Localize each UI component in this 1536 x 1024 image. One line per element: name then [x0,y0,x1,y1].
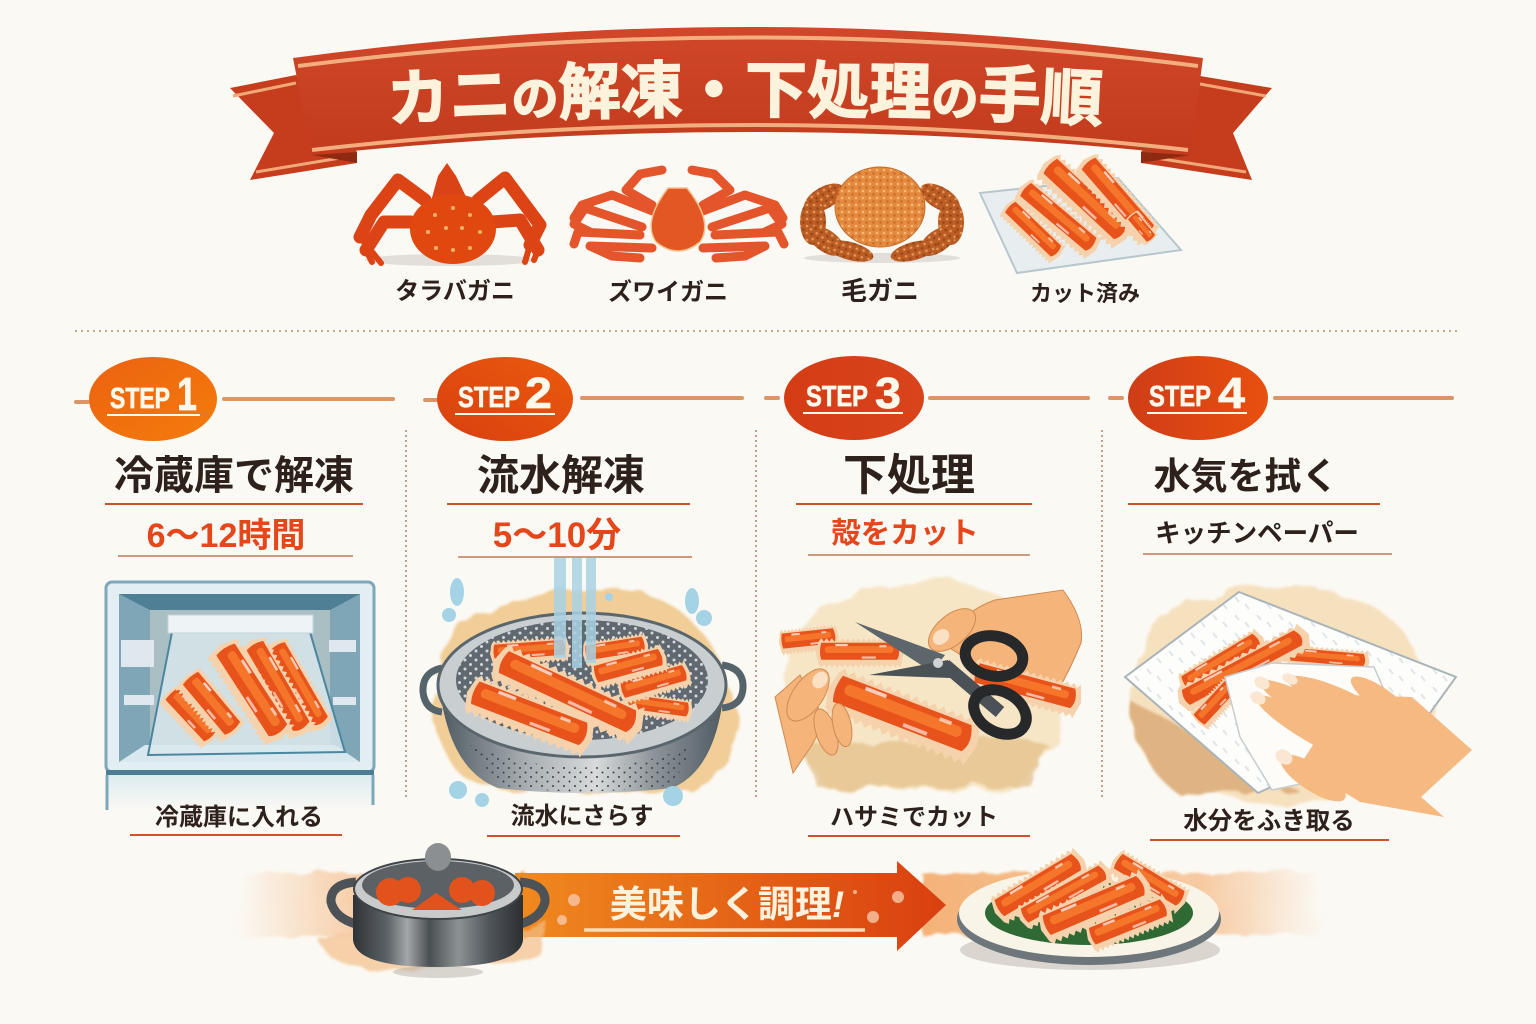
label: kegani: 毛ガニ [841,276,919,306]
step 1 panel [76,357,393,835]
step 4 badge: 4 [1218,369,1246,418]
banner top stripe [298,38,1198,66]
banner bottom stripe [312,125,1188,150]
running water [554,558,596,668]
step 1 badge [76,357,393,441]
water droplets [442,578,712,807]
kitchen scissors [855,622,1034,743]
crab legs on plate [987,845,1193,954]
cut crab legs on paper [980,150,1181,273]
step 3 badge: STEP [806,381,868,413]
step 1 caption: 冷蔵庫に入れる [155,804,323,831]
step 1 badge: 1 [177,368,197,420]
step 4 subheading: キッチンペーパー [1155,520,1359,548]
label: zuwai: ズワイガニ [608,278,728,306]
pale band right [922,873,1322,935]
step 2 time: 5～10分 [493,516,621,555]
step 2 heading: 流水解凍 [477,452,645,499]
upper hand [921,590,1082,690]
step 1 heading: 冷蔵庫で解凍 [114,454,354,498]
cooking pot [320,843,550,978]
paper towel [1125,592,1456,793]
step 2 caption: 流水にさらす [510,803,654,830]
step 3 badge: 3 [875,369,901,418]
step 3 illustration: cutting with scissors [775,580,1086,790]
bottom cooking arrow band [236,861,1322,951]
title text: カニの解凍・下処理の手順 [392,59,1102,128]
step 2 panel [423,357,743,836]
crab: taraba [360,163,540,266]
step 4 heading: 水気を拭く [1154,456,1338,497]
crab type labels [395,276,1140,306]
crab pieces in pot [376,877,495,910]
arrow bubbles [557,890,904,925]
freezer bag [148,632,345,755]
frozen legs in bag [157,633,336,751]
step 3 subheading: 殻をカット [831,517,979,550]
step 4 panel [1110,356,1472,840]
step 4 badge: STEP [1149,381,1211,413]
crab: kegani [799,167,965,266]
step 2 badge [425,357,742,441]
crab legs on towel [1172,621,1371,732]
crab legs [778,624,1086,768]
label: taraba: タラバガニ [395,278,515,305]
banner right tail [1141,76,1272,180]
step 1 illustration: refrigerator [106,582,374,810]
crab: zuwai [574,170,784,258]
step 1 badge: STEP [110,383,170,415]
step 3 badge [766,356,1088,440]
crab dish plate [957,845,1221,970]
step 4 badge [1110,356,1452,440]
step 3 panel [766,356,1088,836]
step 3 heading: 下処理 [843,451,975,500]
title banner [230,27,1272,180]
step 4 caption: 水分をふき取る [1183,807,1355,835]
main arrow [515,861,946,951]
step 2 badge: 2 [525,369,552,418]
folded towel [1225,663,1384,790]
step 1 time: 6～12時間 [147,517,305,555]
banner left tail [230,75,357,180]
crab legs in colander [460,632,694,759]
label: cut: カット済み [1030,281,1140,306]
wiping hand [1248,668,1472,817]
arrow text: 美味しく調理! [610,884,844,925]
step 2 illustration: colander under water [423,558,743,807]
pale band left [236,873,526,937]
step 3 caption: ハサミでカット [830,804,998,831]
banner main ribbon [293,27,1203,155]
step 2 badge: STEP [458,382,520,414]
step 4 illustration: drying with paper towel [1125,586,1472,817]
colander handles [423,665,743,712]
arrow underline [584,928,865,932]
lower hand [775,662,855,773]
